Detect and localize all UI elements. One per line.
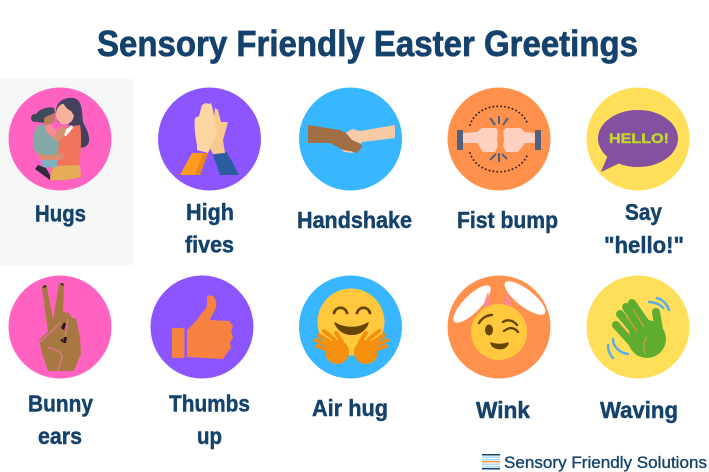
label: hugs: Hugs (35, 200, 86, 226)
title: Sensory Friendly Easter Greetings (97, 23, 638, 64)
label: handshake: Handshake (297, 207, 412, 233)
label: fist bump: Fist bump (457, 207, 558, 233)
icon: say hello speech bubble: HELLO! (609, 130, 669, 146)
label: wink: Wink (476, 397, 530, 423)
label: bunny ears: Bunny (28, 390, 93, 416)
footer brand name: Sensory Friendly Solutions (504, 454, 707, 472)
panel: hugs highlight background (0, 79, 134, 265)
icon: say hello speech bubble (586, 88, 690, 190)
label: high fives: fives (185, 232, 234, 258)
icon: logo stripes (482, 454, 500, 470)
icon: bunny ears hand (8, 276, 112, 378)
label: high fives (185, 199, 234, 258)
label: say hello: Say (625, 199, 662, 225)
label: bunny ears (28, 390, 93, 449)
icon: handshake (299, 88, 402, 190)
icon: waving hand (586, 276, 690, 378)
icon: high fives (158, 88, 261, 190)
icon: hugs (8, 88, 112, 190)
label: thumbs up: Thumbs (169, 390, 250, 416)
icon: air hug emoji (299, 276, 402, 378)
icon: thumbs up (150, 276, 254, 378)
label: say hello: "hello!" (604, 232, 684, 258)
label: high fives: High (186, 199, 234, 225)
logo: Sensory Friendly Solutions (482, 454, 707, 472)
label: waving: Waving (600, 397, 678, 423)
label: air hug: Air hug (312, 395, 388, 421)
label: thumbs up: up (197, 423, 222, 449)
icon: wink emoji with bunny ears (448, 276, 550, 378)
label: bunny ears: ears (38, 423, 82, 449)
label: thumbs up (169, 390, 250, 449)
icon: fist bump (448, 88, 550, 190)
label: say hello (604, 199, 684, 258)
